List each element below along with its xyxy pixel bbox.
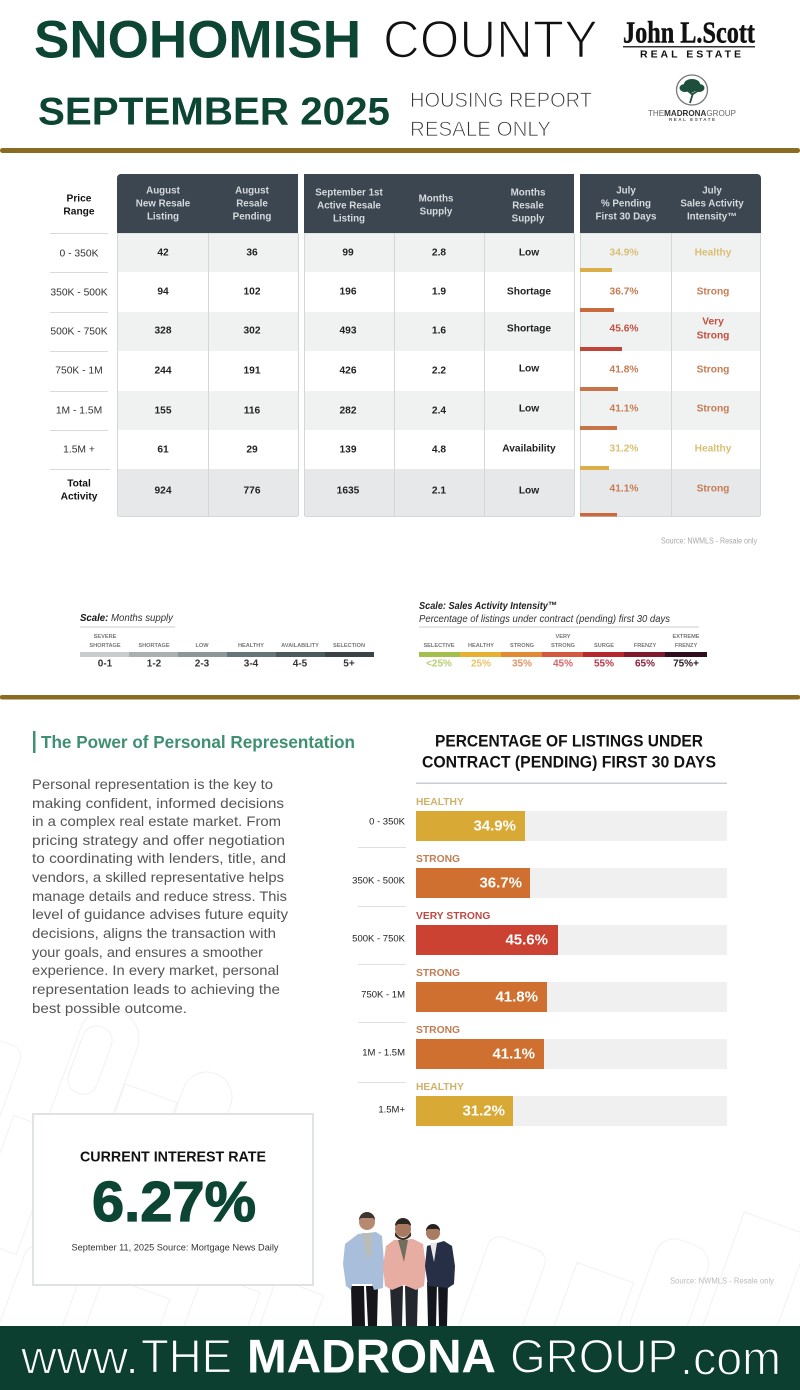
legend: months supply scale: 5+ bbox=[343, 658, 355, 670]
row: 1M - 1.5M: 41.1% bbox=[610, 404, 638, 414]
bar: 0 - 350K: 0 - 350K bbox=[369, 816, 406, 828]
legend: sales activity intensity scale: 75%+ bbox=[673, 658, 699, 670]
row: 1.5M +: 4.8 bbox=[432, 444, 446, 456]
row: 1M - 1.5M: 2.4 bbox=[432, 406, 446, 416]
legend: months supply scale: 4-5 bbox=[293, 658, 308, 670]
row: 0 - 350K: 0 - 350K bbox=[60, 248, 99, 260]
chart title: CONTRACT (PENDING) FIRST 30 DAYS bbox=[422, 752, 716, 772]
text block: personal representation bbox=[32, 776, 288, 1016]
legend: sales activity intensity scale: HEALTHY bbox=[468, 643, 494, 649]
legend: sales activity intensity scale: 45% bbox=[553, 658, 573, 670]
text block: personal representation: best possible outcome. bbox=[32, 1000, 187, 1016]
bar: 750K - 1M: 750K - 1M bbox=[361, 990, 405, 1000]
row: 0 - 350K: 2.8 bbox=[432, 248, 446, 258]
row: 500K - 750K: 1.6 bbox=[432, 326, 446, 336]
row: 1M - 1.5M: 282 bbox=[340, 406, 357, 416]
logo: The Madrona Group: THEMADRONAGROUP bbox=[648, 108, 736, 118]
table header: August columns: Pending bbox=[233, 212, 271, 222]
row: 1M - 1.5M bbox=[56, 404, 729, 430]
bar: 500K - 750K: 45.6% bbox=[505, 932, 548, 948]
subheading: Housing Report Resale Only: HOUSING REPORT bbox=[410, 88, 592, 112]
bar: 1M - 1.5M: 41.1% bbox=[492, 1046, 535, 1062]
table header: July columns bbox=[580, 174, 761, 233]
bar: 750K - 1M: STRONG bbox=[416, 968, 460, 979]
table header: September columns bbox=[304, 174, 574, 233]
bar: 1.5M+ bbox=[378, 1082, 727, 1126]
text block: personal representation: pricing strategy and offer negotiation bbox=[32, 832, 285, 848]
legend: months supply scale bbox=[80, 612, 374, 670]
table header: price range bbox=[63, 194, 95, 218]
legend: months supply scale: 0-1 bbox=[98, 658, 113, 670]
row: 1.5M +: Healthy bbox=[695, 444, 732, 454]
row: 1M - 1.5M: 1M - 1.5M bbox=[56, 406, 102, 416]
source note: table: Source: NWMLS - Resale only bbox=[661, 536, 757, 546]
legend: sales activity intensity scale bbox=[419, 600, 707, 670]
text block: personal representation: Personal representation is the key to bbox=[32, 776, 273, 792]
logo: The Madrona Group: REAL ESTATE bbox=[669, 117, 715, 122]
title: Snohomish County: COUNTY bbox=[383, 10, 598, 70]
row: total activity: 2.1 bbox=[432, 486, 446, 496]
text block: personal representation: representation leads to achieving the bbox=[32, 981, 280, 997]
table header: July columns: July bbox=[702, 186, 722, 196]
legend: sales activity intensity scale: 25% bbox=[471, 658, 491, 670]
bar: 500K - 750K: VERY STRONG bbox=[416, 911, 490, 922]
legend: months supply scale: SEVERE bbox=[94, 634, 117, 640]
legend: months supply scale: HEALTHY bbox=[238, 643, 264, 649]
legend: sales activity intensity scale: 55% bbox=[594, 658, 614, 670]
row: 500K - 750K: 328 bbox=[154, 326, 172, 336]
legend: months supply scale: 3-4 bbox=[244, 658, 259, 670]
row: total activity: 1635 bbox=[337, 486, 360, 496]
row: 350K - 500K: Strong bbox=[697, 286, 729, 298]
row: 750K - 1M: Low bbox=[519, 364, 539, 374]
panel: current interest rate: September 11, 2025 Source: Mortgage News Daily bbox=[72, 1242, 279, 1254]
table header: September columns: Supply bbox=[512, 214, 545, 224]
legend: months supply scale: Scale: Months supply bbox=[80, 612, 174, 624]
row: 750K - 1M: 41.8% bbox=[610, 364, 638, 376]
row: total activity: Activity bbox=[61, 492, 98, 502]
table header: September columns: September 1st bbox=[315, 188, 383, 198]
text block: personal representation: vendors, a skilled representative helps bbox=[32, 869, 284, 885]
table header: September columns: Listing bbox=[333, 214, 365, 224]
table header: August columns: August bbox=[146, 186, 181, 196]
row: 0 - 350K: 99 bbox=[342, 248, 354, 258]
text block: personal representation: your goals, and ensures a smoother bbox=[32, 944, 263, 960]
table header: September columns: Months bbox=[511, 188, 546, 198]
heading: The Power of Personal Representation: The Power of Personal Representation bbox=[41, 732, 355, 752]
row: 0 - 350K: 42 bbox=[157, 248, 169, 258]
logo: John L. Scott Real Estate: REAL ESTATE bbox=[640, 48, 741, 60]
footer: website banner: .com bbox=[680, 1332, 781, 1384]
legend: sales activity intensity scale: STRONG bbox=[510, 643, 534, 649]
legend: months supply scale: 2-3 bbox=[195, 658, 210, 670]
table header: July columns: Intensity™ bbox=[687, 212, 737, 222]
row: 750K - 1M: 426 bbox=[340, 366, 357, 376]
legend: sales activity intensity scale: SELECTIVE bbox=[423, 643, 455, 649]
panel: housing data table bbox=[50, 174, 761, 517]
bar: 0 - 350K: HEALTHY bbox=[416, 797, 464, 808]
bar: 750K - 1M: 41.8% bbox=[495, 988, 538, 1006]
row: 0 - 350K: 34.9% bbox=[610, 248, 638, 258]
table header: September columns: Months bbox=[419, 194, 454, 204]
footer: website banner: GROUP bbox=[510, 1330, 678, 1382]
legend: sales activity intensity scale: FRENZY bbox=[634, 643, 656, 649]
row: 0 - 350K: Low bbox=[519, 248, 539, 258]
panel: current interest rate: CURRENT INTEREST RATE bbox=[80, 1148, 266, 1166]
legend: sales activity intensity scale: <25% bbox=[426, 658, 452, 670]
chart: percentage of listings under contract bbox=[352, 732, 727, 1126]
text block: personal representation: level of guidance advises future equity bbox=[32, 906, 288, 922]
table header: price range: Price bbox=[67, 194, 92, 204]
panel: current interest rate: 6.27% bbox=[92, 1170, 256, 1234]
row: 750K - 1M: 191 bbox=[244, 366, 261, 376]
footer: website banner: THE bbox=[141, 1330, 232, 1382]
bar: 0 - 350K: 34.9% bbox=[473, 818, 516, 834]
row: 0 - 350K bbox=[60, 248, 732, 272]
bar: 1.5M+: 1.5M+ bbox=[378, 1104, 405, 1116]
row: 1M - 1.5M: Strong bbox=[697, 404, 729, 414]
row: 1.5M +: Availability bbox=[502, 444, 556, 454]
photo: three team members bbox=[343, 1212, 455, 1326]
bar: 1.5M+: HEALTHY bbox=[416, 1082, 464, 1093]
row: total activity: Total bbox=[67, 478, 91, 490]
table header: July columns: Sales Activity bbox=[680, 198, 744, 210]
row: 350K - 500K: 94 bbox=[157, 286, 169, 298]
row: 350K - 500K: 36.7% bbox=[610, 286, 638, 298]
heading: September 2025: SEPTEMBER 2025 bbox=[38, 90, 390, 134]
row: total activity: Strong bbox=[697, 484, 729, 494]
table header: September columns: Supply bbox=[420, 206, 453, 218]
row: 1M - 1.5M: 116 bbox=[244, 406, 261, 416]
row: 500K - 750K: 493 bbox=[340, 326, 357, 336]
legend: months supply scale: SELECTION bbox=[333, 643, 365, 649]
table header: July columns: July bbox=[616, 186, 636, 196]
table header: August columns: August bbox=[235, 186, 270, 196]
footer: website banner bbox=[0, 1326, 800, 1390]
row: 1.5M +: 31.2% bbox=[610, 444, 638, 454]
bar: 750K - 1M bbox=[361, 968, 727, 1012]
legend: months supply scale: AVAILABILITY bbox=[281, 643, 319, 649]
bar: 1.5M+: 31.2% bbox=[462, 1102, 505, 1120]
table header: July columns: First 30 Days bbox=[596, 212, 657, 222]
legend: months supply scale: LOW bbox=[195, 643, 209, 649]
row: 750K - 1M: 2.2 bbox=[432, 366, 446, 376]
bar: 1M - 1.5M: STRONG bbox=[416, 1025, 460, 1036]
row: 500K - 750K bbox=[50, 316, 729, 351]
row: total activity: 924 bbox=[154, 486, 172, 496]
text block: personal representation: decisions, aligns the transaction with bbox=[32, 925, 276, 941]
row: 1M - 1.5M: Low bbox=[519, 404, 539, 414]
legend: months supply scale: 1-2 bbox=[147, 658, 162, 670]
bar: 350K - 500K bbox=[352, 854, 727, 898]
table header: September columns: Active Resale bbox=[317, 200, 381, 212]
row: 350K - 500K: Shortage bbox=[507, 286, 551, 298]
bar: 350K - 500K: 350K - 500K bbox=[352, 876, 406, 886]
row: 500K - 750K: Shortage bbox=[507, 324, 551, 334]
legend: months supply scale: SHORTAGE bbox=[89, 643, 121, 649]
text block: personal representation: making confident, informed decisions bbox=[32, 795, 284, 811]
legend: sales activity intensity scale: VERY bbox=[555, 634, 571, 640]
row: 1.5M +: 61 bbox=[157, 444, 169, 456]
legend: months supply scale: SHORTAGE bbox=[138, 643, 170, 649]
bar: 350K - 500K: STRONG bbox=[416, 854, 460, 865]
row: 0 - 350K: Healthy bbox=[695, 248, 732, 258]
row: 1.5M +: 139 bbox=[340, 444, 357, 456]
row: 500K - 750K: Strong bbox=[697, 330, 729, 342]
table header: August columns bbox=[117, 174, 298, 233]
row: 750K - 1M: 244 bbox=[154, 366, 172, 376]
row: 350K - 500K: 350K - 500K bbox=[50, 288, 108, 298]
legend: sales activity intensity scale: EXTREME bbox=[672, 634, 700, 640]
legend: sales activity intensity scale: SURGE bbox=[594, 643, 614, 649]
chart title: PERCENTAGE OF LISTINGS UNDER bbox=[435, 732, 703, 750]
table header: August columns: Listing bbox=[147, 212, 179, 222]
row: 0 - 350K: 36 bbox=[246, 248, 258, 258]
row: 500K - 750K: Very bbox=[702, 316, 724, 328]
row: 1.5M +: 29 bbox=[246, 444, 258, 456]
row: total activity: 776 bbox=[244, 486, 261, 496]
subheading: Housing Report Resale Only: RESALE ONLY bbox=[410, 117, 551, 141]
logo: The Madrona Group bbox=[648, 75, 736, 122]
title: Snohomish County: SNOHOMISH bbox=[34, 10, 361, 70]
row: 1.5M + bbox=[63, 444, 732, 470]
row: 1M - 1.5M: 155 bbox=[154, 406, 172, 416]
row: total activity bbox=[61, 478, 729, 516]
footer: website banner: MADRONA bbox=[247, 1330, 496, 1382]
text block: personal representation: to coordinating with lenders, title, and bbox=[32, 850, 286, 866]
row: 750K - 1M: Strong bbox=[697, 364, 729, 376]
legend: sales activity intensity scale: 35% bbox=[512, 658, 532, 670]
row: 350K - 500K bbox=[50, 286, 729, 312]
row: 500K - 750K: 500K - 750K bbox=[50, 326, 108, 338]
row: total activity: 41.1% bbox=[610, 484, 638, 494]
subheading: Housing Report Resale Only bbox=[410, 88, 592, 141]
text block: personal representation: in a complex real estate market. From bbox=[32, 813, 281, 829]
bar: 1M - 1.5M bbox=[362, 1025, 727, 1069]
panel: current interest rate bbox=[33, 1114, 313, 1285]
table header: July columns: % Pending bbox=[601, 198, 651, 210]
row: 500K - 750K: 302 bbox=[244, 326, 261, 336]
bar: 500K - 750K: 500K - 750K bbox=[352, 934, 406, 944]
text block: personal representation: experience. In every market, personal bbox=[32, 962, 279, 978]
bar: 500K - 750K bbox=[352, 911, 727, 955]
table header: September columns: Resale bbox=[512, 200, 544, 212]
footer: website banner: www. bbox=[20, 1330, 139, 1384]
source note: chart: Source: NWMLS - Resale only bbox=[670, 1276, 774, 1286]
row: 350K - 500K: 102 bbox=[244, 286, 261, 298]
row: 350K - 500K: 196 bbox=[340, 286, 357, 298]
table header: August columns: Resale bbox=[236, 198, 268, 210]
logo: John L. Scott Real Estate: John L.Scott bbox=[623, 14, 756, 50]
bar: 350K - 500K: 36.7% bbox=[479, 874, 522, 892]
logo: John L. Scott Real Estate bbox=[623, 14, 756, 60]
legend: sales activity intensity scale: Percentage of listings under contract (pending) first 30 days bbox=[419, 613, 671, 625]
legend: sales activity intensity scale: STRONG bbox=[551, 643, 575, 649]
title: Snohomish County bbox=[34, 10, 598, 70]
row: 500K - 750K: 45.6% bbox=[610, 324, 638, 334]
table header: price range: Range bbox=[63, 206, 95, 218]
legend: sales activity intensity scale: Scale: Sales Activity Intensity™ bbox=[419, 600, 557, 612]
text block: personal representation: manage details and reduce stress. This bbox=[32, 888, 287, 904]
row: total activity: Low bbox=[519, 486, 539, 496]
row: 750K - 1M: 750K - 1M bbox=[55, 366, 103, 376]
legend: sales activity intensity scale: 65% bbox=[635, 658, 655, 670]
table row backgrounds bbox=[50, 233, 761, 517]
row: 1.5M +: 1.5M + bbox=[63, 444, 95, 456]
legend: sales activity intensity scale: FRENZY bbox=[675, 643, 697, 649]
bar: 1M - 1.5M: 1M - 1.5M bbox=[362, 1048, 405, 1058]
chart title bbox=[416, 732, 727, 784]
row: 750K - 1M bbox=[55, 364, 729, 391]
row: 350K - 500K: 1.9 bbox=[432, 286, 446, 298]
bar: 0 - 350K bbox=[369, 797, 727, 841]
table header: August columns: New Resale bbox=[136, 198, 191, 210]
